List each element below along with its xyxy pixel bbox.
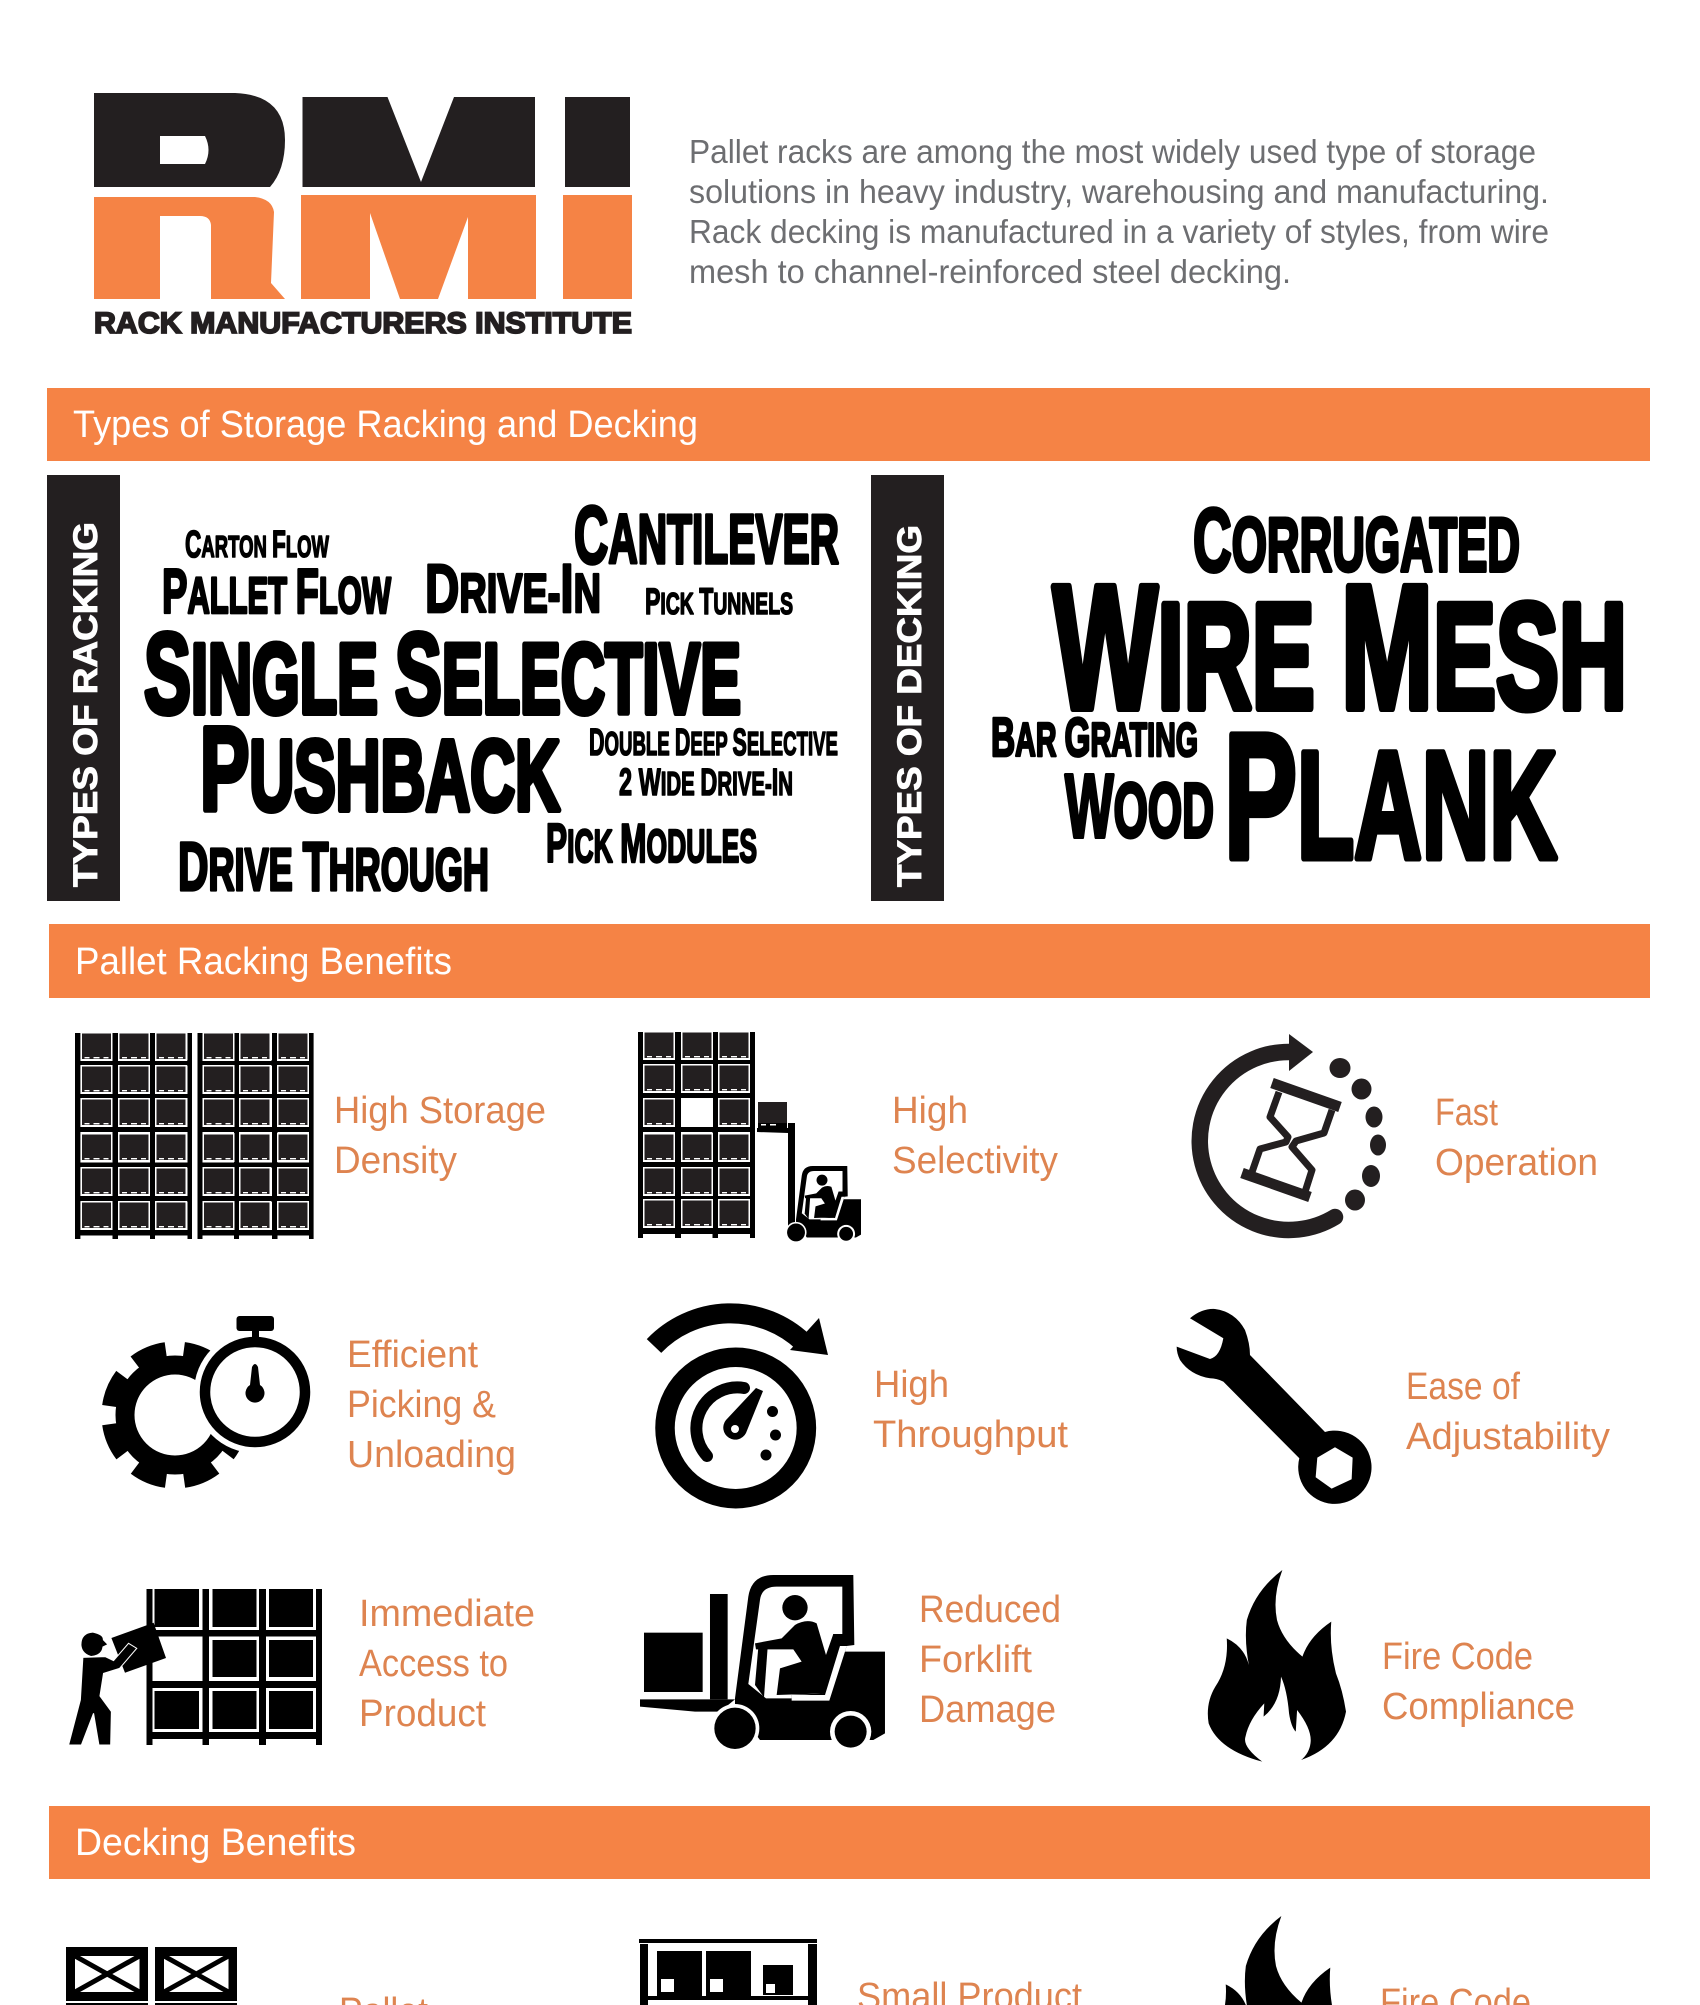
panel: types of racking tab: TYPES OF RACKING [67, 522, 105, 887]
panel: types of decking tab: TYPES OF DECKING [891, 525, 929, 887]
icon: hourglass in circular arrow [1200, 1034, 1386, 1230]
intro paragraph: solutions in heavy industry, warehousing and manufacturing. [689, 173, 1549, 210]
label: Fast [1435, 1092, 1498, 1134]
heading bar: pallet racking benefits [49, 924, 1650, 998]
icon: gear with stopwatch [110, 1316, 316, 1480]
word cloud: types of racking: CANTILEVER [574, 490, 839, 581]
word cloud: types of racking: CARTON FLOW [185, 524, 329, 566]
logo: orange letters [94, 195, 632, 299]
logo: wordmark: RACK MANUFACTURERS INSTITUTE [94, 307, 632, 340]
benefit: high throughput [654, 1313, 1068, 1499]
word cloud: types of decking: BAR GRATING [991, 706, 1198, 768]
heading bar: pallet racking benefits: Pallet Racking Benefits [75, 941, 452, 983]
label: High [874, 1364, 949, 1406]
icon: rack and forklift [638, 1031, 861, 1243]
label: High Storage [334, 1090, 546, 1132]
label: Product [359, 1693, 486, 1735]
word cloud: types of racking: PICK TUNNELS [645, 581, 793, 622]
label [892, 1090, 1058, 1182]
benefit: fire code compliance [1208, 1570, 1575, 1762]
heading bar: decking benefits [49, 1806, 1650, 1879]
word cloud: types of racking: DOUBLE DEEP SELECTIVE [589, 722, 838, 764]
label: Density [334, 1140, 457, 1182]
word cloud: types of racking: 2 WIDE DRIVE-IN [619, 762, 793, 804]
panel: types of decking tab [871, 475, 944, 901]
icon: flame [1208, 1570, 1346, 1762]
word cloud: types of racking: DRIVE THROUGH [178, 828, 489, 905]
intro paragraph [689, 133, 1549, 290]
label [919, 1589, 1061, 1731]
label: Efficient [347, 1334, 478, 1376]
word cloud: types of racking: PICK MODULES [546, 812, 757, 874]
heading bar: types of storage racking and decking: Types of Storage Racking and Decking [73, 404, 698, 446]
label: Ease of [1406, 1366, 1520, 1408]
benefit: reduced forklift damage [640, 1575, 1061, 1753]
benefit: efficient picking and unloading [110, 1316, 516, 1480]
icon: wrench [1177, 1309, 1372, 1504]
word cloud: types of racking: PUSHBACK [200, 703, 560, 836]
RMI logo [94, 93, 632, 340]
icon: speedometer with arrow [654, 1313, 828, 1499]
logo: black letters [94, 93, 630, 187]
word cloud: types of racking: DRIVE-IN [425, 550, 601, 627]
icon: worker loading rack [69, 1589, 322, 1745]
panel: types of racking tab [47, 475, 120, 901]
label: Damage [919, 1689, 1056, 1731]
label: Picking & [347, 1384, 496, 1426]
word cloud: types of decking: WOOD [1065, 757, 1214, 857]
heading bar: types of storage racking and decking [47, 388, 1650, 461]
icon: flame [1207, 1916, 1345, 2005]
label: High [892, 1090, 968, 1132]
label: Unloading [347, 1434, 516, 1476]
label [1382, 1636, 1575, 1728]
label: Adjustability [1406, 1416, 1610, 1458]
label: Operation [1435, 1142, 1598, 1184]
icon: forklift [640, 1575, 885, 1753]
label: Selectivity [892, 1140, 1058, 1182]
label: Fire Code [1382, 1636, 1533, 1678]
benefit: immediate access to product [69, 1589, 535, 1745]
label [1435, 1092, 1598, 1184]
label: Compliance [1382, 1686, 1575, 1728]
icon: double pallet rack [75, 1032, 314, 1239]
word cloud: types of racking: SINGLE SELECTIVE [144, 611, 741, 738]
benefit: high storage density [75, 1032, 546, 1239]
intro paragraph: Rack decking is manufactured in a variety of styles, from wire [689, 213, 1549, 250]
benefit: fast operation [1200, 1034, 1598, 1230]
intro paragraph: mesh to channel-reinforced steel decking. [689, 253, 1291, 290]
benefit: small product (cropped at page edge) [639, 1939, 1082, 2005]
label [359, 1593, 535, 1735]
word cloud: types of decking [991, 491, 1627, 896]
intro paragraph: Pallet racks are among the most widely used type of storage [689, 133, 1536, 170]
word cloud: types of racking [144, 490, 839, 905]
benefit: fire code (cropped at page edge) [1207, 1916, 1531, 2005]
label [334, 1090, 546, 1182]
word cloud: types of racking: PALLET FLOW [162, 557, 392, 627]
label [1406, 1366, 1610, 1458]
heading bar: decking benefits: Decking Benefits [75, 1822, 356, 1864]
benefit: ease of adjustability [1177, 1309, 1610, 1504]
label: Reduced [919, 1589, 1061, 1631]
benefit: pallet (cropped at page edge) [66, 1947, 428, 2005]
label: Forklift [919, 1639, 1032, 1681]
label [873, 1364, 1068, 1456]
icon: pallet boxes [66, 1947, 237, 2005]
icon: shelf with small boxes [639, 1939, 817, 2005]
label: Immediate [359, 1593, 535, 1635]
label: Throughput [873, 1414, 1068, 1456]
label: Access to [359, 1643, 508, 1685]
benefit: high selectivity [638, 1031, 1058, 1243]
label [347, 1334, 516, 1476]
